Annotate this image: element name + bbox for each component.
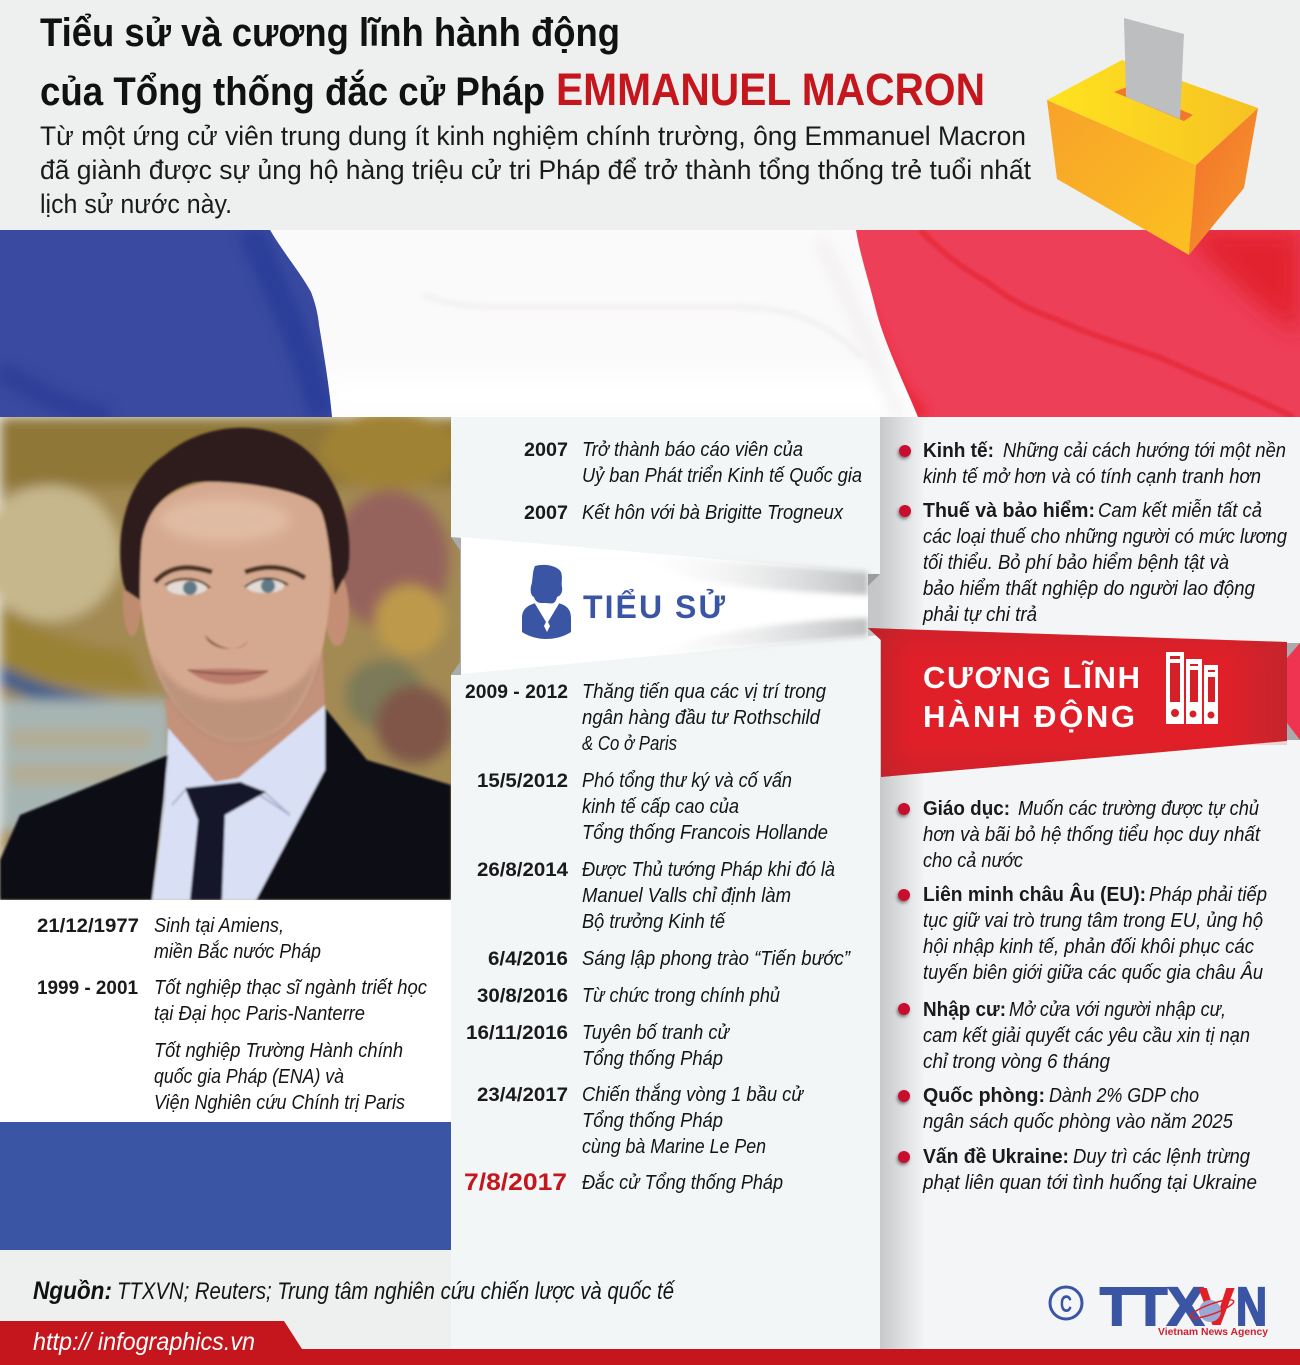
bullet list: lower platform: Quốc phòng: bbox=[923, 1085, 1045, 1107]
blue block bbox=[0, 1122, 451, 1250]
eyebrows bbox=[155, 567, 305, 582]
timeline early years: Viện Nghiên cứu Chính trị Paris bbox=[154, 1092, 405, 1114]
TTXVN wordmark: N bbox=[1236, 1277, 1267, 1337]
timeline early years: 21/12/1977 bbox=[37, 916, 139, 937]
timeline career: Tuyên bố tranh cử bbox=[582, 1022, 730, 1044]
timeline early years: 1999 - 2001 bbox=[37, 978, 138, 999]
timeline career: Từ chức trong chính phủ bbox=[582, 985, 780, 1007]
agency logo bbox=[1050, 1277, 1268, 1338]
face bbox=[139, 479, 331, 742]
panel: center column lower bbox=[451, 635, 880, 1349]
ears bbox=[122, 584, 142, 636]
intro text block: lịch sử nước này. bbox=[40, 189, 232, 219]
TTXVN wordmark: TTX bbox=[1100, 1277, 1204, 1337]
bullet list: lower platform: Liên minh châu Âu (EU): bbox=[923, 882, 1146, 906]
timeline career: ngân hàng đầu tư Rothschild bbox=[582, 707, 821, 729]
timeline career: 2007 bbox=[524, 503, 568, 524]
bullet list: upper platform: Thuế và bảo hiểm: bbox=[923, 500, 1095, 522]
icon: person in suit bbox=[522, 565, 571, 639]
TTXVN wordmark bbox=[1100, 1277, 1267, 1337]
source line: TTXVN; Reuters; Trung tâm nghiên cứu chiến lược và quốc tế bbox=[117, 1278, 675, 1305]
shirt bbox=[152, 705, 325, 900]
timeline career: 7/8/2017 bbox=[464, 1169, 567, 1196]
bullet list: lower platform: tuyến biên giới giữa các quốc gia châu Âu bbox=[923, 961, 1263, 984]
timeline career: 16/11/2016 bbox=[466, 1023, 568, 1044]
timeline career: cùng bà Marine Le Pen bbox=[582, 1136, 766, 1158]
timeline career: 23/4/2017 bbox=[477, 1085, 568, 1106]
timeline career: 30/8/2016 bbox=[477, 986, 568, 1007]
bullet list: lower platform: Duy trì các lệnh trừng bbox=[1073, 1146, 1250, 1168]
bullet list: lower platform: Nhập cư: bbox=[923, 999, 1006, 1021]
timeline early years: quốc gia Pháp (ENA) và bbox=[154, 1066, 344, 1088]
bullet dots bbox=[899, 445, 911, 517]
timeline career bbox=[464, 439, 862, 1196]
panel: center column upper bbox=[451, 417, 880, 574]
center column back shade bbox=[868, 574, 880, 638]
timeline career: Tổng thống Pháp bbox=[582, 1110, 723, 1132]
timeline career: Manuel Valls chỉ định làm bbox=[582, 885, 791, 907]
tie bbox=[185, 782, 266, 900]
title: Tiểu sử và cương lĩnh hành động bbox=[40, 11, 620, 55]
bullet list: upper platform bbox=[899, 440, 1287, 626]
bullet list: lower platform: tục giữ vai trò trung tâm trong EU, ủng hộ bbox=[923, 910, 1263, 932]
ballot paper bbox=[1124, 18, 1184, 119]
bullet list: lower platform: phạt liên quan tới tình huống tại Ukraine bbox=[922, 1172, 1257, 1194]
heading: CƯƠNG LĨNH HÀNH ĐỘNG: HÀNH ĐỘNG bbox=[923, 698, 1135, 734]
heading: TIỂU SỬ: TIỂU SỬ bbox=[583, 589, 725, 625]
tagline: Vietnam News Agency bbox=[1158, 1326, 1268, 1338]
bullet dots bbox=[898, 803, 910, 1163]
timeline career: Trở thành báo cáo viên của bbox=[582, 439, 803, 461]
jacket left bbox=[0, 755, 168, 900]
timeline career: 2009 - 2012 bbox=[465, 682, 568, 703]
portrait backing fold bbox=[451, 537, 461, 675]
timeline early years: miền Bắc nước Pháp bbox=[154, 940, 321, 963]
neck bbox=[165, 640, 325, 785]
bullet list: lower platform: Giáo dục: bbox=[923, 798, 1010, 820]
bullet list: lower platform: cho cả nước bbox=[923, 850, 1023, 872]
title bbox=[40, 11, 985, 115]
eyes bbox=[167, 581, 207, 595]
bullet list: lower platform: cam kết giải quyết các yêu cầu xin tị nạn bbox=[923, 1025, 1250, 1047]
intro text block bbox=[40, 121, 1031, 219]
intro text block: Từ một ứng cử viên trung dung ít kinh nghiệm chính trường, ông Emmanuel Macron bbox=[40, 121, 1026, 151]
copyright mark bbox=[1050, 1287, 1082, 1319]
timeline early years bbox=[37, 915, 427, 1114]
bullet list: upper platform: phải tự chi trả bbox=[922, 604, 1037, 626]
bullet list: lower platform: Muốn các trường được tự chủ bbox=[1018, 798, 1259, 820]
right column edge shade bbox=[880, 417, 925, 1349]
timeline career: Tổng thống Francois Hollande bbox=[582, 822, 828, 844]
timeline career: Kết hôn với bà Brigitte Trogneux bbox=[582, 502, 844, 524]
portrait figure bbox=[0, 428, 451, 900]
timeline career: Đắc cử Tổng thống Pháp bbox=[582, 1171, 783, 1194]
heading: CƯƠNG LĨNH HÀNH ĐỘNG bbox=[923, 660, 1140, 734]
timeline career: & Co ở Paris bbox=[582, 733, 677, 755]
bullet list: lower platform: Dành 2% GDP cho bbox=[1049, 1085, 1199, 1107]
source line: Nguồn: bbox=[33, 1277, 112, 1305]
copyright mark: C bbox=[1060, 1291, 1072, 1318]
bullet list: upper platform: bảo hiểm thất nghiệp do người lao động bbox=[923, 578, 1255, 600]
title: của Tổng thống đắc cử Pháp bbox=[40, 68, 545, 114]
timeline career: Phó tổng thư ký và cố vấn bbox=[582, 770, 792, 792]
bullet list: lower platform: hội nhập kinh tế, phản đối khôi phục các bbox=[923, 936, 1254, 958]
timeline career: 6/4/2016 bbox=[488, 949, 568, 970]
bullet list: lower platform: hơn và bãi bỏ hệ thống tiểu học duy nhất bbox=[923, 824, 1261, 846]
fold triangle bbox=[868, 574, 880, 586]
bullet list: lower platform: ngân sách quốc phòng vào năm 2025 bbox=[923, 1111, 1234, 1133]
bullet list: upper platform: Cam kết miễn tất cả bbox=[1098, 499, 1262, 522]
bullet list: lower platform: Vấn đề Ukraine: bbox=[923, 1146, 1069, 1168]
footer band bbox=[0, 1321, 1300, 1365]
timeline career: Tổng thống Pháp bbox=[582, 1048, 723, 1070]
bullet list: lower platform: chỉ trong vòng 6 tháng bbox=[923, 1051, 1110, 1073]
portrait photo bbox=[0, 410, 470, 900]
TTXVN wordmark: V bbox=[1198, 1277, 1235, 1337]
panel: right column bbox=[880, 417, 1300, 1349]
timeline career: kinh tế cấp cao của bbox=[582, 796, 739, 818]
platform ribbon bbox=[868, 628, 1300, 777]
timeline early years: Sinh tại Amiens, bbox=[154, 915, 284, 937]
jacket right bbox=[256, 708, 451, 900]
bullet list: upper platform: Kinh tế: bbox=[923, 440, 994, 462]
globe bbox=[1189, 1296, 1235, 1322]
hair bbox=[120, 428, 349, 600]
timeline career: Thăng tiến qua các vị trí trong bbox=[582, 681, 826, 703]
biography ribbon bbox=[461, 537, 880, 674]
timeline career: Bộ trưởng Kinh tế bbox=[582, 911, 727, 933]
website link: http:// infographics.vn bbox=[33, 1328, 255, 1356]
bullet list: lower platform: Mở cửa với người nhập cư, bbox=[1009, 999, 1226, 1021]
timeline career: 15/5/2012 bbox=[477, 771, 568, 792]
ballot box bbox=[1047, 18, 1258, 255]
bullet list: upper platform: tối thiểu. Bỏ phí bảo hiểm bệnh tật và bbox=[923, 552, 1229, 574]
photo background tapestry bbox=[0, 410, 470, 900]
timeline early years: Tốt nghiệp thạc sĩ ngành triết học bbox=[154, 977, 427, 999]
left column white panel bbox=[0, 900, 451, 1122]
timeline career: 26/8/2014 bbox=[477, 860, 568, 881]
timeline career: Uỷ ban Phát triển Kinh tế Quốc gia bbox=[582, 465, 862, 487]
timeline career: 2007 bbox=[524, 440, 568, 461]
intro text block: đã giành được sự ủng hộ hàng triệu cử tri Pháp để trở thành tổng thống trẻ tuổi nhất bbox=[40, 155, 1031, 185]
heading: CƯƠNG LĨNH HÀNH ĐỘNG: CƯƠNG LĨNH bbox=[923, 660, 1140, 695]
timeline early years: Tốt nghiệp Trường Hành chính bbox=[154, 1040, 403, 1062]
bullet list: lower platform bbox=[898, 798, 1267, 1194]
bullet list: lower platform: Pháp phải tiếp bbox=[1149, 884, 1267, 906]
icon: binders bbox=[1166, 652, 1218, 724]
mouth bbox=[188, 669, 268, 684]
timeline career: Sáng lập phong trào “Tiến bước” bbox=[582, 948, 851, 970]
timeline early years: tại Đại học Paris-Nanterre bbox=[154, 1003, 365, 1025]
bullet list: upper platform: kinh tế mở hơn và có tính cạnh tranh hơn bbox=[923, 466, 1261, 488]
timeline career: Được Thủ tướng Pháp khi đó là bbox=[582, 859, 835, 881]
timeline career: Chiến thắng vòng 1 bầu cử bbox=[582, 1083, 804, 1106]
shirt collar shadows bbox=[172, 782, 290, 815]
French flag banner bbox=[0, 230, 1300, 417]
title: EMMANUEL MACRON bbox=[556, 64, 985, 115]
nose bbox=[205, 635, 248, 649]
